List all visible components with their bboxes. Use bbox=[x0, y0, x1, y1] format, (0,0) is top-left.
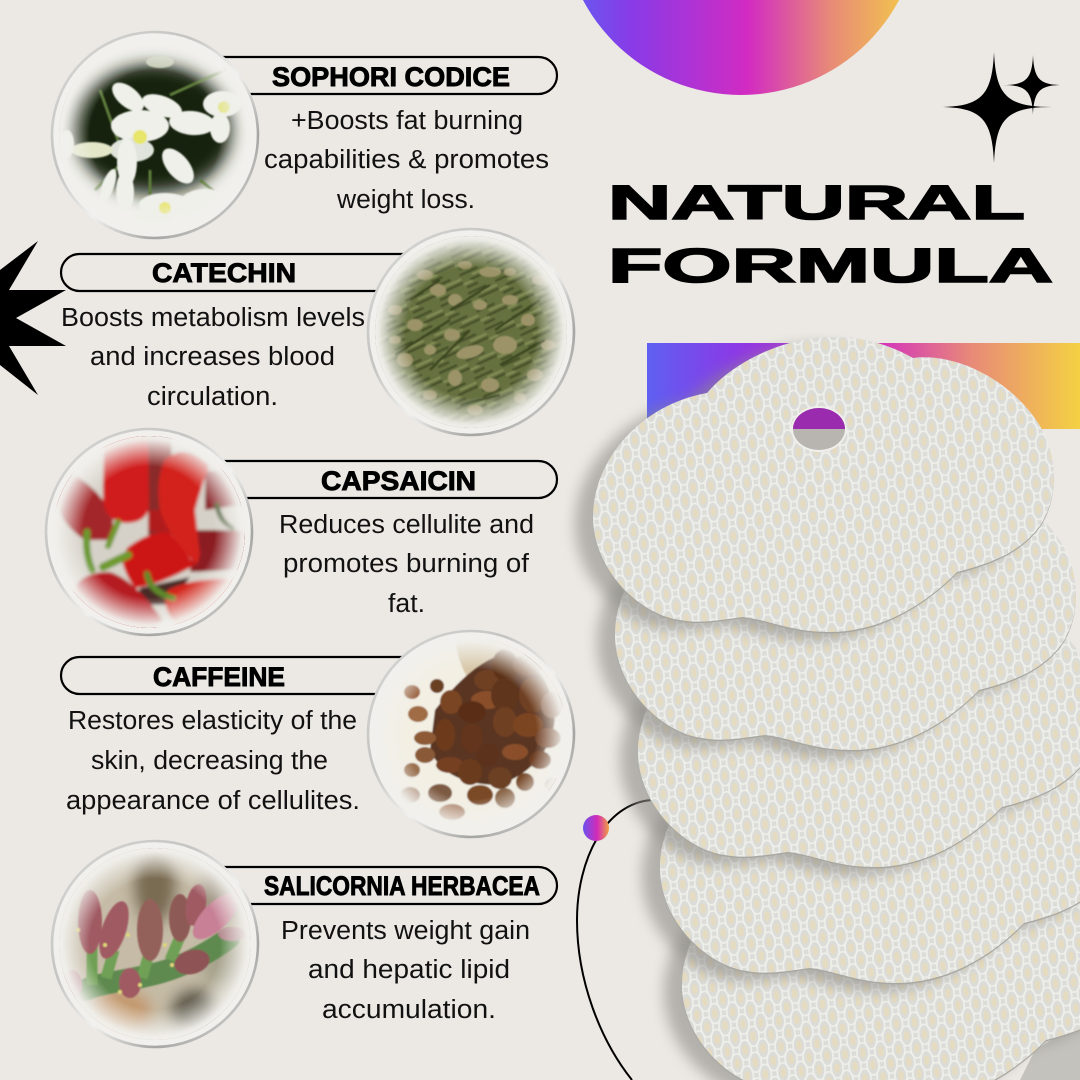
ingredient photo: white flowers bbox=[52, 32, 258, 238]
panel: salicornia herbacea bbox=[50, 840, 557, 1050]
description: Restores elasticity of the bbox=[68, 707, 357, 735]
description bbox=[264, 107, 549, 214]
ingredient photo: red chillies bbox=[46, 429, 252, 640]
patch 1 bbox=[575, 337, 1054, 640]
description bbox=[279, 511, 534, 618]
patch 5 bbox=[664, 805, 1080, 1080]
heading: CAFFEINE bbox=[153, 662, 285, 692]
heading pill bbox=[150, 57, 557, 94]
title bbox=[608, 177, 1053, 293]
description: capabilities & promotes bbox=[264, 146, 549, 174]
heading pill bbox=[61, 657, 461, 694]
heading pill bbox=[150, 461, 557, 498]
heading: SALICORNIA HERBACEA bbox=[264, 871, 540, 901]
heading pill bbox=[61, 254, 461, 291]
panel: sophori codice bbox=[52, 32, 557, 238]
ingredient photo: salicornia plant bbox=[50, 840, 260, 1050]
heading: CATECHIN bbox=[152, 258, 296, 288]
description: and increases blood bbox=[90, 343, 335, 371]
description: +Boosts fat burning bbox=[291, 107, 523, 135]
title: NATURAL bbox=[608, 177, 1025, 230]
description bbox=[61, 304, 365, 411]
gradient dot bbox=[583, 815, 609, 841]
panel: capsaicin bbox=[46, 429, 557, 640]
panel: catechin bbox=[61, 229, 574, 435]
gradient half circle bbox=[562, 0, 920, 95]
description: fat. bbox=[388, 590, 425, 618]
ingredient photo: green tea bbox=[368, 229, 574, 435]
description: skin, decreasing the bbox=[91, 747, 328, 775]
ingredient photo: coffee beans bbox=[368, 631, 574, 837]
corner shadow bbox=[1020, 1030, 1080, 1080]
patch 3 bbox=[620, 572, 1080, 875]
description bbox=[281, 917, 530, 1024]
title: FORMULA bbox=[608, 240, 1053, 293]
description: Prevents weight gain bbox=[281, 917, 530, 945]
icon: starburst bbox=[0, 241, 66, 395]
description: and hepatic lipid bbox=[308, 956, 510, 984]
description: Reduces cellulite and bbox=[279, 511, 534, 539]
patch 4 bbox=[642, 688, 1080, 991]
curved line bbox=[577, 800, 652, 1080]
heading: CAPSAICIN bbox=[321, 466, 476, 496]
description: Boosts metabolism levels bbox=[61, 304, 365, 332]
icon: sparkles bbox=[938, 52, 1062, 163]
description: weight loss. bbox=[336, 186, 475, 214]
panel: caffeine bbox=[61, 631, 574, 837]
patch hole bbox=[791, 406, 847, 452]
description: circulation. bbox=[147, 383, 278, 411]
heading pill bbox=[150, 867, 557, 904]
heading: SOPHORI CODICE bbox=[272, 62, 510, 92]
description: promotes burning of bbox=[283, 550, 530, 578]
description bbox=[66, 707, 360, 815]
gradient rectangle bbox=[647, 343, 1080, 429]
patch 2 bbox=[597, 455, 1076, 758]
patches stack bbox=[575, 337, 1080, 1080]
description: appearance of cellulites. bbox=[66, 787, 360, 815]
description: accumulation. bbox=[322, 996, 496, 1024]
